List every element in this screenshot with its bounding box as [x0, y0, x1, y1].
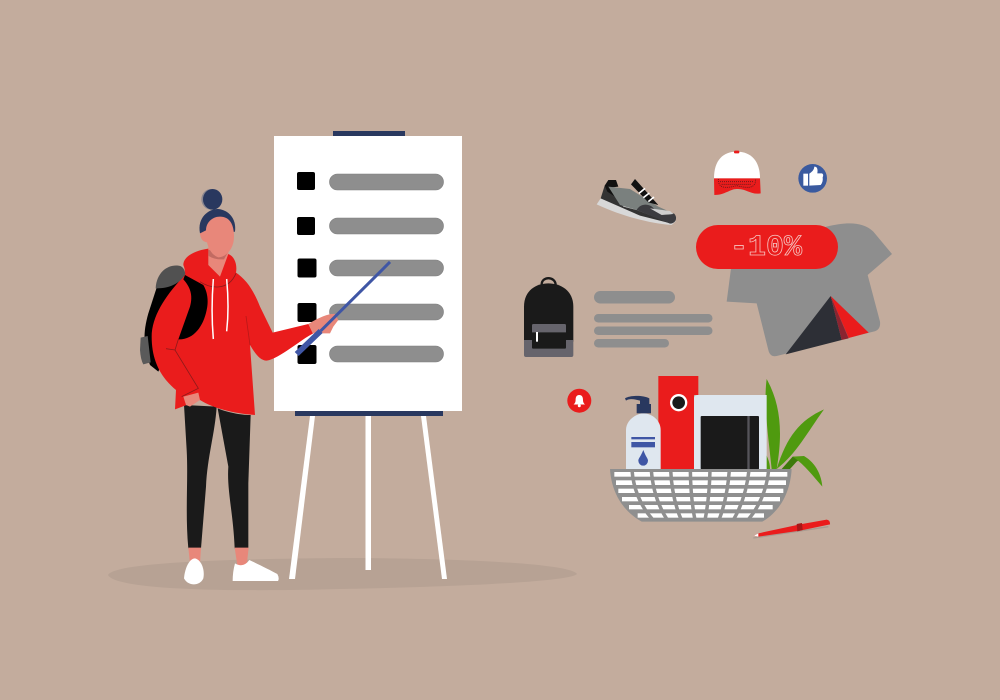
cap icon — [714, 151, 761, 195]
like badge — [798, 164, 827, 193]
t-shirt — [727, 223, 892, 356]
notebook — [694, 395, 767, 469]
hand soap bottle — [625, 396, 661, 469]
red binder — [658, 376, 698, 469]
backpack icon — [524, 278, 573, 357]
presentation easel — [274, 131, 462, 579]
discount pill — [696, 225, 838, 269]
discount pill: -10% — [730, 231, 803, 265]
backpack shoulder pad — [156, 266, 185, 288]
ground shadow — [108, 558, 577, 590]
backpack side pocket — [140, 336, 151, 364]
checklist — [297, 172, 444, 364]
face and neck — [200, 217, 234, 277]
basket — [610, 469, 792, 522]
hair — [199, 189, 235, 237]
pocket hand — [183, 393, 200, 407]
shopping basket with products — [610, 376, 830, 538]
presenter upper body — [140, 189, 390, 415]
backpack body — [144, 280, 183, 372]
text placeholder bars — [594, 291, 712, 348]
plant — [759, 379, 824, 487]
backpack strap — [178, 275, 208, 339]
hoodie details — [166, 273, 250, 397]
pointer stick — [297, 262, 390, 354]
red pen — [753, 520, 830, 538]
pointing hand — [308, 314, 338, 333]
board — [274, 136, 462, 411]
notification bell — [567, 389, 591, 413]
red hoodie — [152, 249, 313, 415]
sneaker icon — [597, 179, 676, 225]
presenter legs and shoes — [184, 405, 279, 584]
